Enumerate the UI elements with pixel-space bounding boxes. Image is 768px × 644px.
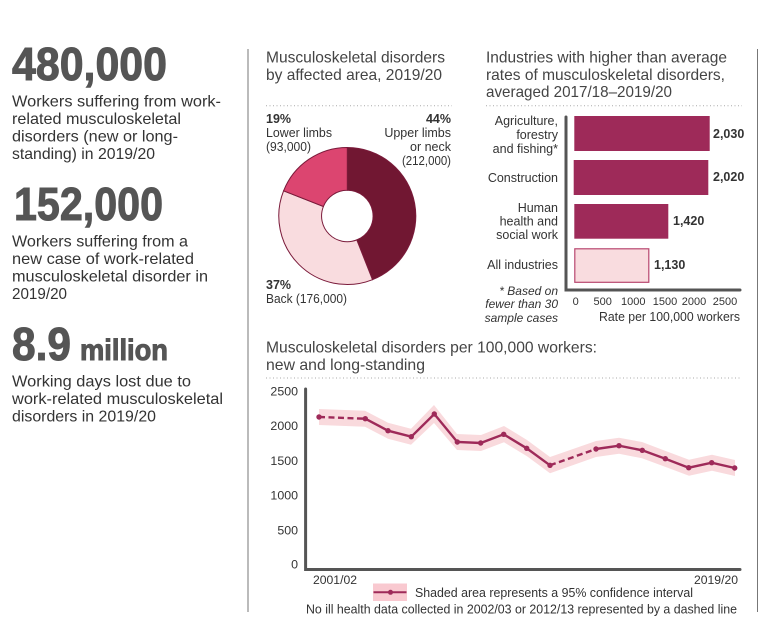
data line xyxy=(319,414,735,468)
category labels: Human xyxy=(518,201,558,215)
label: lower limbs xyxy=(266,112,332,154)
category labels: social work xyxy=(496,228,559,242)
label: back: 37% xyxy=(266,278,291,292)
label: back xyxy=(266,278,347,306)
big number: 8.9 million: million xyxy=(80,334,168,367)
legend swatch xyxy=(373,584,407,601)
x axis ticks xyxy=(573,296,737,308)
x axis ticks: 500 xyxy=(594,296,612,308)
heading: line chart: new and long-standing xyxy=(266,357,425,374)
description: 152,000 workers: Workers suffering from a xyxy=(12,234,188,251)
category labels xyxy=(487,114,559,272)
heading: industries: rates of musculoskeletal disorders, xyxy=(486,67,725,84)
x axis ticks: 0 xyxy=(573,296,579,308)
panel: donut by affected area xyxy=(266,50,452,306)
category labels: forestry xyxy=(516,128,559,142)
y axis ticks: 2000 xyxy=(270,419,298,433)
x axis title: Rate per 100,000 workers xyxy=(599,310,740,324)
description: 480,000 workers xyxy=(12,94,221,163)
y axis ticks: 0 xyxy=(291,558,298,572)
segment: upper limbs or neck 44% xyxy=(347,148,416,280)
stat: 152,000 workers xyxy=(12,178,208,303)
label: back: Back (176,000) xyxy=(266,292,347,306)
bar: construction xyxy=(574,160,708,195)
y axis ticks: 1500 xyxy=(270,454,298,468)
x axis ticks: 2500 xyxy=(713,296,737,308)
description: 480,000 workers: standing) in 2019/20 xyxy=(12,146,155,163)
label: upper limbs: 44% xyxy=(426,112,451,126)
note: dashed line: No ill health data collected in 2002/03 or 2012/13 represented by a dashed line xyxy=(306,602,737,616)
description: 8.9 million days: Working days lost due to xyxy=(12,374,191,391)
heading: line chart: Musculoskeletal disorders per 100,000 workers: xyxy=(266,340,597,357)
description: 8.9 million days: work-related musculoskeletal xyxy=(11,391,223,408)
category labels: and fishing* xyxy=(493,142,558,156)
x axis ticks: 1000 xyxy=(621,296,646,308)
description: 480,000 workers: Workers suffering from work- xyxy=(12,94,221,111)
description: 480,000 workers: disorders (new or long- xyxy=(12,128,178,146)
heading: affected area xyxy=(266,50,445,84)
footnote: * Based on xyxy=(499,284,558,298)
x axis labels: 2019/20 xyxy=(694,573,738,587)
description: 480,000 workers: related musculoskeletal xyxy=(12,111,181,128)
description: 152,000 workers: 2019/20 xyxy=(12,286,67,303)
bar: all industries xyxy=(575,249,649,282)
category labels: All industries xyxy=(487,258,558,272)
label: lower limbs: Lower limbs xyxy=(266,126,332,140)
label: lower limbs: 19% xyxy=(266,112,291,126)
description: 152,000 workers: new case of work-related xyxy=(12,251,194,268)
panel: industries bar chart xyxy=(485,50,744,325)
heading: industries: averaged 2017/18–2019/20 xyxy=(486,84,672,101)
description: 152,000 workers: musculoskeletal disorder in xyxy=(12,268,208,286)
category labels: Agriculture, xyxy=(495,114,558,128)
bar: agriculture xyxy=(574,116,710,151)
x axis ticks: 1500 xyxy=(653,296,677,308)
heading: line chart xyxy=(266,340,597,374)
segment: back 37% xyxy=(279,191,372,285)
data points xyxy=(316,411,737,471)
bars xyxy=(574,116,710,282)
description: 8.9 million days xyxy=(11,374,223,426)
heading: industries xyxy=(486,50,727,101)
big number: 152,000: 152,000 xyxy=(14,178,163,230)
footnote: fewer than 30 xyxy=(485,297,558,311)
heading: affected area: by affected area, 2019/20 xyxy=(266,67,442,84)
x axis labels xyxy=(313,573,738,587)
stat: 8.9 million days xyxy=(11,318,223,426)
legend xyxy=(373,584,693,601)
y axis ticks: 1000 xyxy=(270,488,298,502)
value labels: 2,020 xyxy=(713,170,744,184)
category labels: Construction xyxy=(488,171,558,185)
footnote: sample cases xyxy=(485,311,558,325)
value labels: 2,030 xyxy=(713,127,744,141)
axes xyxy=(306,389,740,570)
x axis labels: 2001/02 xyxy=(313,573,357,587)
value labels xyxy=(654,127,744,272)
y axis ticks: 500 xyxy=(277,524,298,538)
bar: human health xyxy=(574,204,668,239)
description: 8.9 million days: disorders in 2019/20 xyxy=(12,408,156,426)
heading: affected area: Musculoskeletal disorders xyxy=(266,50,445,67)
panel: line chart xyxy=(266,340,740,616)
label: upper limbs: Upper limbs xyxy=(384,126,451,140)
segment: lower limbs 19% xyxy=(284,147,347,206)
label: upper limbs: or neck xyxy=(410,140,452,154)
value labels: 1,130 xyxy=(654,258,685,272)
x axis ticks: 2000 xyxy=(682,296,706,308)
label: upper limbs: (212,000) xyxy=(402,154,451,168)
category labels: health and xyxy=(500,214,558,228)
description: 152,000 workers xyxy=(12,234,208,303)
big number: 8.9 million: 8.9 xyxy=(12,318,71,370)
y axis ticks: 2500 xyxy=(270,384,298,398)
stat: 480,000 workers xyxy=(12,38,221,163)
legend text: Shaded area represents a 95% confidence interval xyxy=(415,586,693,600)
donut chart xyxy=(279,147,416,285)
y axis ticks xyxy=(270,384,298,572)
heading: industries: Industries with higher than average xyxy=(486,50,727,67)
big number: 480,000: 480,000 xyxy=(12,38,167,90)
label: upper limbs xyxy=(384,112,452,168)
value labels: 1,420 xyxy=(673,214,704,228)
big number: 8.9 million xyxy=(12,318,168,370)
label: lower limbs: (93,000) xyxy=(266,140,311,154)
confidence band xyxy=(319,405,735,476)
footnote xyxy=(485,284,558,325)
axes xyxy=(566,117,740,290)
